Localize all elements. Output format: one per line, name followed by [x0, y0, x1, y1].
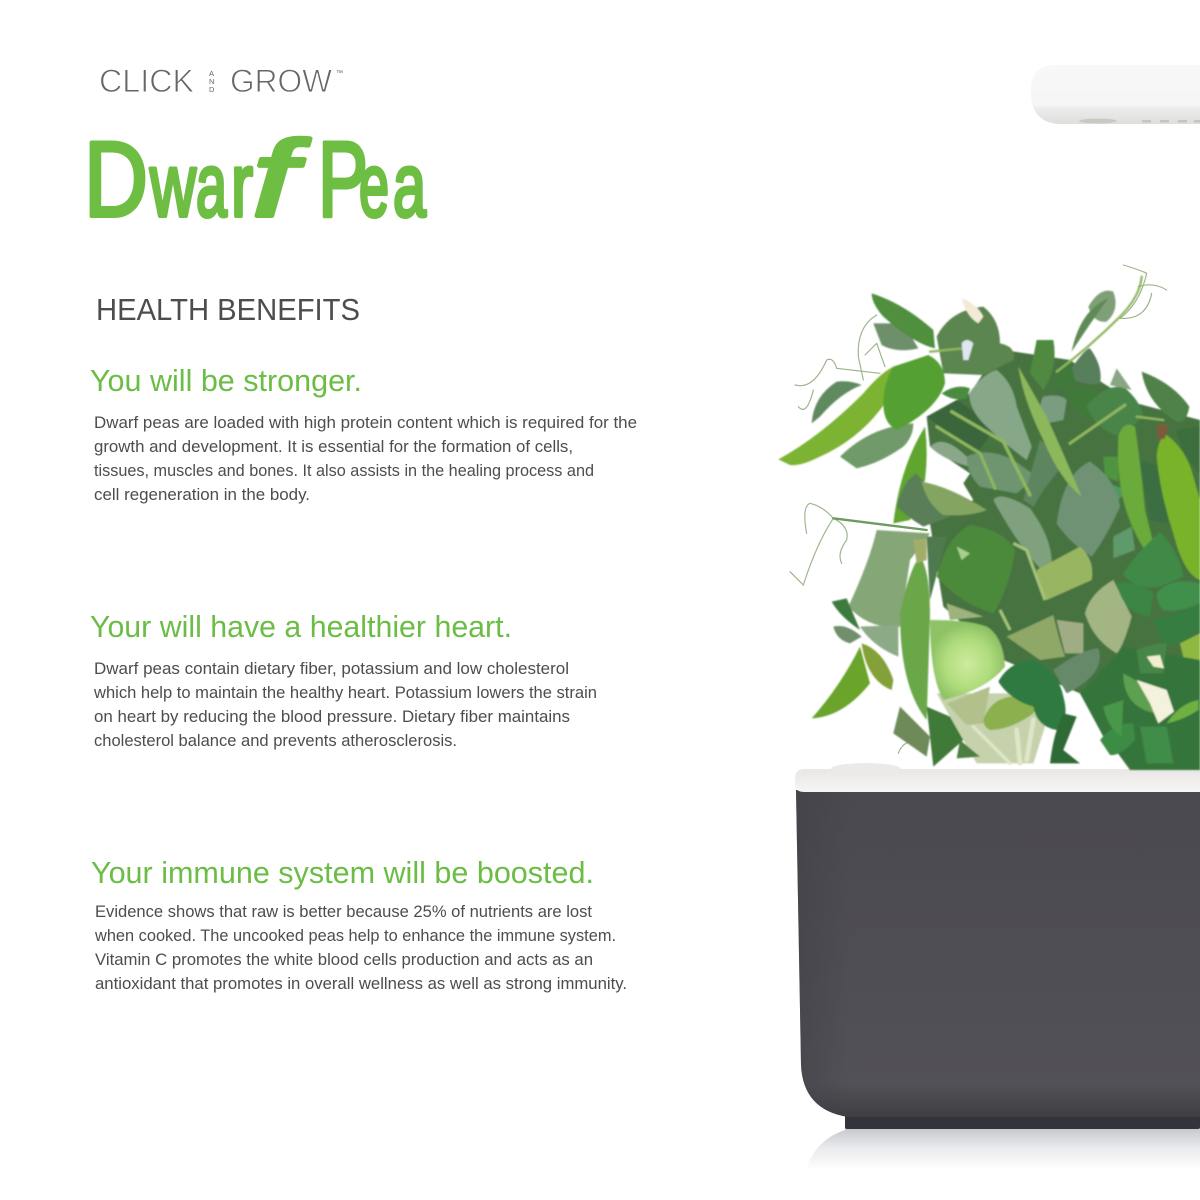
benefit text: fiber and potassium: on heart by reducing the blood pressure. Dietary fiber maintains: [94, 708, 570, 726]
logo: Click and Grow: N: [209, 77, 214, 86]
pod: center long: [900, 557, 930, 720]
top flower cluster: [937, 307, 1014, 375]
stems: [930, 277, 1163, 495]
leaf: pale bright: [930, 620, 1005, 700]
benefit text: fiber and potassium: cholesterol balance and prevents atherosclerosis.: [94, 732, 457, 750]
title: Dwarf Pea: f: [252, 118, 311, 239]
title: Dwarf Pea: e: [359, 136, 389, 236]
right pods: [1118, 425, 1160, 570]
bottom backdrop: [937, 693, 1047, 763]
pod: left top: [778, 367, 893, 465]
left pods and leaves: [812, 381, 862, 423]
logo: Click and Grow: A: [209, 69, 214, 78]
benefit 3: [91, 855, 627, 993]
lower center leaves: [993, 496, 1052, 568]
flowers: [962, 298, 1174, 723]
benefit heading: heart: Your will have a healthier heart.: [90, 609, 512, 644]
leaf: top left: [872, 293, 935, 348]
tendrils: [790, 265, 1183, 763]
pod: upper right thin: [1018, 367, 1082, 497]
benefit text: protein: tissues, muscles and bones. It also assists in the healing process and: [94, 462, 594, 480]
benefit text: fiber and potassium: [93, 660, 597, 750]
title: Dwarf Pea: r: [231, 136, 253, 236]
right lower leaves: [1113, 527, 1135, 558]
planter pot: [795, 763, 1200, 1129]
dark foliage mass: [927, 350, 1200, 770]
benefit text: fiber and potassium: which help to maintain the healthy heart. Potassium lowers the strain: [93, 684, 597, 702]
logo: Click and Grow: GROW: [230, 63, 333, 99]
planter tray: [795, 763, 1200, 792]
benefit text: raw peas: Vitamin C promotes the white blood cells production and acts as an: [95, 951, 593, 969]
title: Dwarf Pea: [84, 118, 427, 239]
leaf: bright center: [883, 355, 945, 430]
benefit text: protein: cell regeneration in the body.: [94, 486, 310, 504]
benefit text: raw peas: antioxidant that promotes in overall wellness as well as strong immunity.: [95, 975, 627, 993]
heading: Health Benefits: HEALTH BENEFITS: [96, 292, 360, 327]
title: Dwarf Pea: a: [196, 136, 228, 236]
benefit text: protein: growth and development. It is essential for the formation of cells,: [94, 438, 573, 456]
benefit text: raw peas: [94, 903, 627, 993]
floor reflection: [806, 1128, 1200, 1170]
benefit text: protein: [94, 414, 637, 504]
pod: center stem: [893, 427, 927, 523]
benefit 2: [90, 609, 597, 750]
right top leaves: [1142, 372, 1189, 422]
lower left pod: [812, 647, 870, 718]
center leaves: [1057, 462, 1120, 557]
title: Dwarf Pea: D: [84, 119, 148, 239]
logo: Click and Grow: D: [209, 85, 215, 94]
benefit heading: immune system: Your immune system will be boosted.: [91, 855, 594, 890]
logo: Click and Grow: ™: [336, 70, 343, 77]
lamp: [1031, 65, 1200, 124]
benefit text: raw peas: when cooked. The uncooked peas help to enhance the immune system.: [94, 927, 616, 945]
title: Dwarf Pea: w: [149, 136, 197, 236]
pea plant: [778, 277, 1200, 770]
benefit heading: stronger: You will be stronger.: [90, 363, 362, 398]
benefit text: raw peas: Evidence shows that raw is better because 25% of nutrients are lost: [95, 903, 592, 921]
lower left big leaf: [848, 530, 930, 627]
logo: Click and Grow: CLICK: [99, 63, 194, 99]
benefit text: fiber and potassium: Dwarf peas contain dietary fiber, potassium and low cholesterol: [94, 660, 569, 678]
benefit 1: [90, 363, 637, 504]
bottom leaves: [947, 687, 990, 725]
lower right mass: [1080, 647, 1200, 770]
benefit text: protein: Dwarf peas are loaded with high protein content which is required for the: [94, 414, 637, 432]
logo: Click and Grow: [99, 63, 343, 99]
title: Dwarf Pea: a: [393, 136, 427, 236]
title: Dwarf Pea: P: [318, 119, 368, 239]
